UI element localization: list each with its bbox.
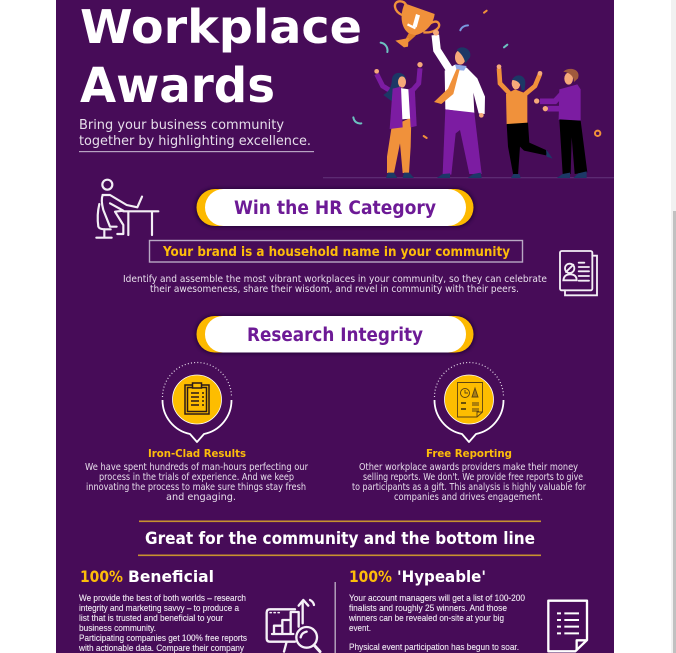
heading: 100% Beneficial: Beneficial bbox=[128, 567, 214, 586]
icon: report document bbox=[458, 382, 482, 417]
text: Free Reporting: to participants as a gift. This analysis is highly valuable for bbox=[352, 482, 586, 493]
pin: Iron-Clad Results bbox=[162, 363, 232, 442]
text: Iron-Clad Results: process in the trials of experience. And we keep bbox=[99, 472, 294, 483]
text: Hypeable: event. bbox=[349, 623, 371, 633]
title bbox=[80, 0, 362, 114]
scrollbar bbox=[671, 0, 676, 653]
text: Free Reporting bbox=[352, 462, 586, 503]
button: Research Integrity: Research Integrity bbox=[247, 325, 423, 346]
section heading: Great for the community: Great for the community and the bottom line bbox=[145, 529, 535, 548]
text: Hypeable: winners can be revealed on-site at your big bbox=[348, 613, 504, 623]
icon: trophy bbox=[395, 1, 439, 47]
button: Win the HR Category: Win the HR Category bbox=[234, 198, 436, 219]
pin: Free Reporting bbox=[434, 363, 504, 442]
text: Hypeable: Physical event participation has begun to soar. bbox=[349, 642, 519, 652]
text: Beneficial: list that is trusted and beneficial to your bbox=[79, 613, 223, 623]
text: Hypeable: Your account managers will get a list of 100-200 bbox=[349, 593, 525, 603]
text: Beneficial: integrity and marketing savvy – to produce a bbox=[79, 603, 240, 613]
text: Iron-Clad Results: We have spent hundreds of man-hours perfecting our bbox=[85, 462, 308, 473]
person: woman in orange top bbox=[497, 64, 553, 178]
title: Workplace bbox=[80, 0, 362, 54]
text: Beneficial: business community. bbox=[79, 623, 156, 633]
heading: 100% Beneficial bbox=[80, 567, 214, 586]
intro paragraph: Identify and assemble the most vibrant workplaces in your community, so they can celebrate bbox=[123, 274, 547, 285]
icon: document list bbox=[548, 601, 587, 651]
subtitle: Bring your business community bbox=[79, 118, 284, 133]
person: man in purple sweater bbox=[534, 69, 587, 178]
illustration: team celebrating with trophy bbox=[323, 1, 614, 178]
person: woman in purple jacket bbox=[374, 62, 423, 178]
icon: clipboard bbox=[185, 383, 209, 414]
text: Hypeable bbox=[348, 593, 525, 652]
text: Beneficial: We provide the best of both worlds – research bbox=[79, 593, 246, 603]
person: man with tie holding trophy bbox=[433, 30, 485, 178]
divider bbox=[334, 582, 336, 653]
heading: 100% Hypeable: 'Hypeable' bbox=[397, 567, 486, 586]
button: Win the HR Category bbox=[195, 188, 475, 228]
text: Free Reporting: companies and drives engagement. bbox=[394, 492, 543, 503]
title: Awards bbox=[80, 58, 275, 114]
icon: analytics monitor bbox=[267, 600, 320, 652]
text: Free Reporting: selling reports. We don't. We provide free reports to give bbox=[363, 472, 583, 483]
heading: 100% Hypeable bbox=[349, 567, 486, 586]
text: Beneficial bbox=[78, 593, 247, 653]
text: Beneficial: Participating companies get 100% free reports bbox=[79, 633, 247, 643]
button: Research Integrity bbox=[195, 315, 475, 354]
subtitle: together by highlighting excellence. bbox=[79, 134, 311, 149]
tagline box bbox=[150, 240, 522, 262]
heading: Free Reporting: Free Reporting bbox=[426, 447, 512, 460]
text: Hypeable: finalists and roughly 25 winners. And those bbox=[349, 603, 507, 613]
heading: 100% Hypeable: 100% bbox=[349, 567, 392, 586]
text: Iron-Clad Results: innovating the process to make sure things stay fresh bbox=[86, 482, 306, 493]
icon: profile document bbox=[560, 251, 597, 295]
intro paragraph bbox=[123, 274, 547, 295]
heading: 100% Beneficial: 100% bbox=[80, 567, 123, 586]
text: Beneficial: with actionable data. Compare their company bbox=[78, 643, 244, 653]
heading: Iron-Clad Results: Iron-Clad Results bbox=[148, 447, 246, 460]
confetti bbox=[353, 11, 600, 138]
text: Free Reporting: Other workplace awards providers make their money bbox=[359, 462, 578, 473]
tagline box: Your brand is a household name in your community bbox=[162, 244, 510, 260]
icon: person at desk bbox=[96, 180, 158, 238]
subtitle bbox=[79, 118, 314, 152]
text: Iron-Clad Results: and engaging. bbox=[166, 492, 236, 503]
ground line bbox=[323, 177, 614, 178]
intro paragraph: their awesomeness, share their wisdom, and revel in community with their peers. bbox=[150, 284, 519, 295]
text: Iron-Clad Results bbox=[85, 462, 308, 503]
